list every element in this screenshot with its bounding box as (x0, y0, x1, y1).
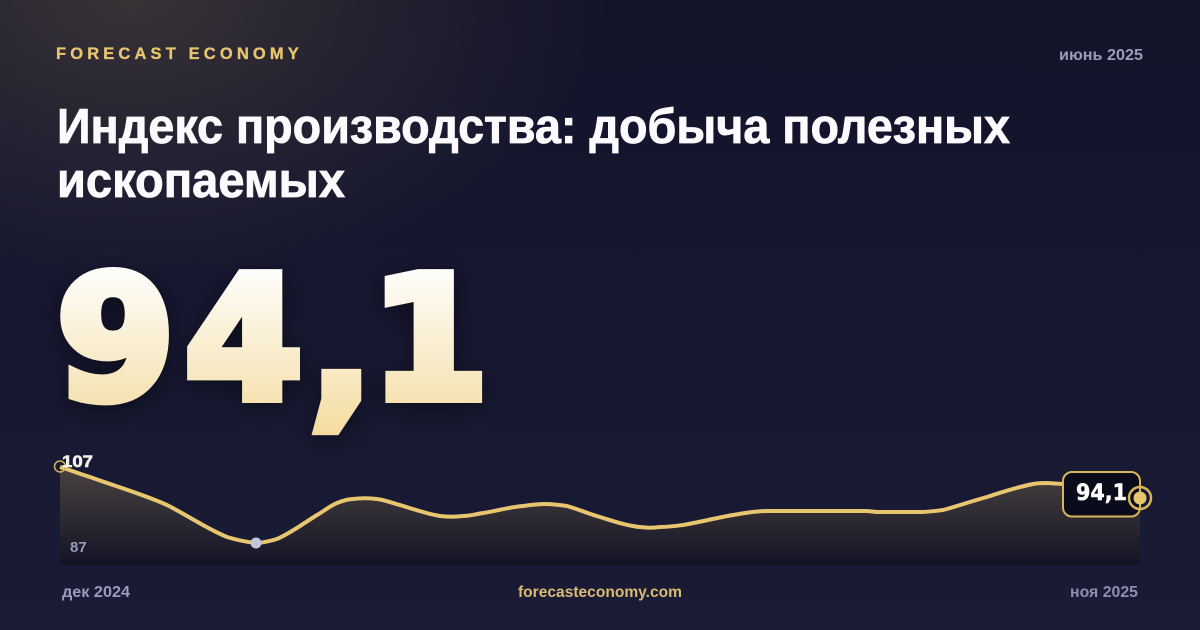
title (57, 100, 1010, 208)
min label: 87 (70, 539, 87, 556)
max label: 107 (62, 452, 93, 471)
value callout (1063, 472, 1140, 516)
chart line (60, 467, 1140, 543)
start point marker (54, 461, 66, 472)
big number: 94,1 (56, 241, 489, 447)
brand label: FORECAST ECONOMY (56, 45, 303, 63)
end point marker (1129, 487, 1151, 509)
title: ископаемых (57, 154, 345, 208)
title: Индекс производства: добыча полезных (57, 100, 1010, 154)
area chart (54, 452, 1151, 565)
min point marker (250, 538, 262, 548)
value callout: 94,1 (1076, 481, 1127, 506)
website: forecasteconomy.com (518, 584, 682, 601)
chart area fill (60, 467, 1140, 565)
end date label: ноя 2025 (1070, 584, 1138, 601)
start date label: дек 2024 (62, 584, 130, 601)
date label: июнь 2025 (1059, 47, 1143, 64)
